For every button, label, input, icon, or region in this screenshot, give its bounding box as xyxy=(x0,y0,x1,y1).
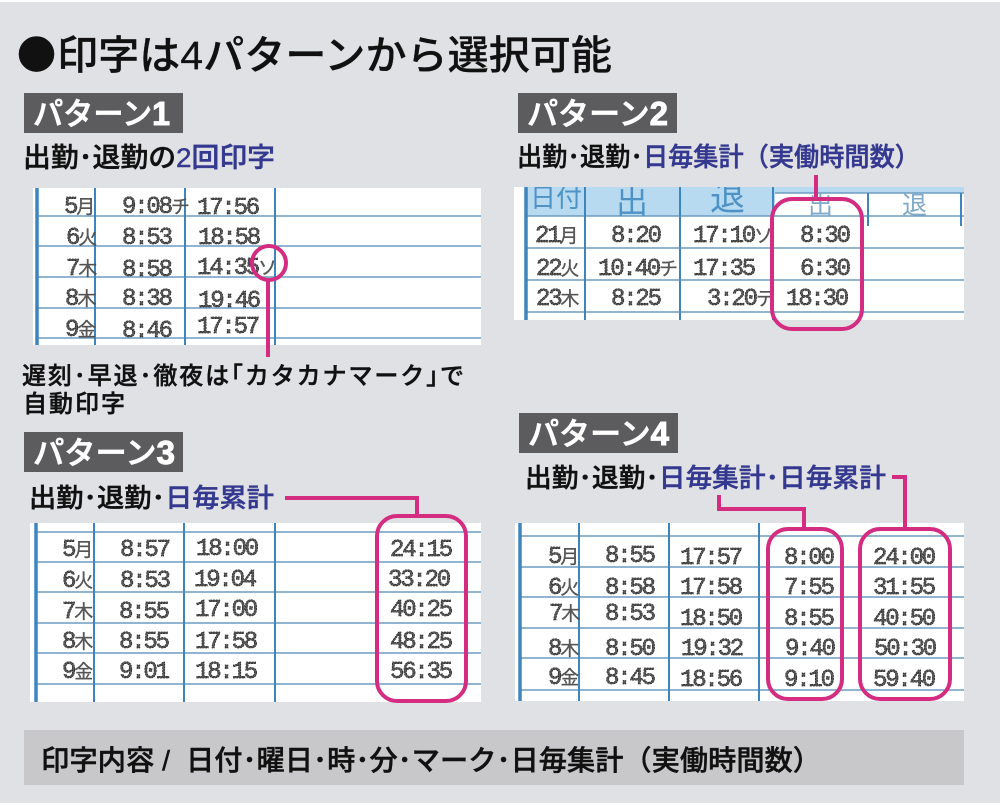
footer bar: print contents: 日付･曜日･時･分･マーク･日毎集計（実働時間数） xyxy=(186,745,821,776)
table: pattern 2 time card xyxy=(514,179,964,320)
table: pattern 1 time card: 18:58 xyxy=(198,225,260,252)
table: pattern 4 time card: 59:40 xyxy=(873,667,935,694)
table: pattern 4 time card: 18:56 xyxy=(680,667,742,694)
table: pattern 4 time card: 31:55 xyxy=(873,575,935,602)
table: pattern 2 time card: 退 xyxy=(902,192,927,220)
table: pattern 2 time card: 出 xyxy=(808,192,833,220)
subheading: pattern 1: 出勤･退勤の2回印字 xyxy=(23,143,275,173)
table: pattern 3 time card: 48:25 xyxy=(390,629,452,656)
table: pattern 4 time card xyxy=(515,523,964,701)
table: pattern 3 time card: 8木 xyxy=(62,629,93,656)
table: pattern 1 time card: 8:53 xyxy=(122,225,172,252)
table: pattern 4 time card: 8:53 xyxy=(605,601,655,628)
table: pattern 2 time card: 22火 xyxy=(536,256,579,283)
table: pattern 4 time card: 9:40 xyxy=(785,636,835,663)
table: pattern 2 time card: 23木 xyxy=(536,286,579,313)
table: pattern 2 time card: 17:35 xyxy=(693,256,755,283)
callout: daily total highlight with leader line xyxy=(719,495,842,699)
table: pattern 2 time card: 8:25 xyxy=(611,286,661,313)
table: pattern 1 time card: 5月 xyxy=(64,194,94,221)
note: katakana mark text: 遅刻･早退･徹夜は｢カタカナマーク｣で xyxy=(22,363,464,390)
title: ● xyxy=(17,25,56,81)
table: pattern 3 time card: 17:00 xyxy=(195,597,257,624)
table: pattern 1 time card: 7木 xyxy=(66,256,97,283)
table: pattern 4 time card: 8:00 xyxy=(784,545,834,572)
panel: pattern 3 xyxy=(24,432,481,702)
note: katakana mark text: 自動印字 xyxy=(23,391,125,418)
table: pattern 1 time card: 8:38 xyxy=(122,286,172,313)
table: pattern 1 time card: 19:46 xyxy=(198,288,260,315)
table: pattern 2 time card: 8:30 xyxy=(800,223,850,250)
footer bar: print contents: 印字内容 / xyxy=(41,745,170,776)
note: katakana mark text xyxy=(22,363,464,418)
heading: pattern 2 label: パターン2 xyxy=(527,95,668,132)
table: pattern 2 time card: 出 xyxy=(616,184,648,220)
panel: pattern 2 xyxy=(514,93,964,329)
table: pattern 4 time card: 17:58 xyxy=(680,575,742,602)
callout: cumulative total highlight with leader line xyxy=(860,477,950,699)
table: pattern 3 time card: 5月 xyxy=(62,537,92,564)
table: pattern 4 time card: 5月 xyxy=(548,544,578,571)
table: pattern 1 time card: 6火 xyxy=(66,225,97,252)
table: pattern 1 time card: 14:35ソ xyxy=(197,255,276,282)
table: pattern 3 time card: 7木 xyxy=(62,599,93,626)
table: pattern 3 time card: 9:01 xyxy=(119,659,170,686)
subheading: pattern 2: 出勤･退勤･日毎集計（実働時間数） xyxy=(517,142,920,172)
table: pattern 3 time card: 6火 xyxy=(62,568,93,595)
callout: daily total highlight with leader line xyxy=(772,175,862,329)
table: pattern 4 time card: 9金 xyxy=(548,665,579,692)
table: pattern 4 time card: 7木 xyxy=(549,601,580,628)
table: pattern 4 time card: 17:57 xyxy=(680,545,742,572)
table: pattern 3 time card: 8:57 xyxy=(120,537,170,564)
table: pattern 3 time card: 33:20 xyxy=(388,567,450,594)
table: pattern 2 time card: 18:30 xyxy=(786,286,848,313)
table: pattern 4 time card: 40:50 xyxy=(873,606,935,633)
heading: pattern 1 label: パターン1 xyxy=(33,95,170,132)
table: pattern 1 time card: 17:57 xyxy=(197,314,259,341)
table: pattern 3 time card: 9金 xyxy=(62,659,93,686)
table: pattern 2 time card: 10:40チ xyxy=(598,256,677,283)
table: pattern 4 time card: 50:30 xyxy=(874,636,936,663)
table: pattern 3 time card: 40:25 xyxy=(390,597,452,624)
table: pattern 3 time card: 8:55 xyxy=(119,599,169,626)
table: pattern 4 time card: 18:50 xyxy=(680,606,742,633)
table: pattern 2 time card: 退 xyxy=(710,179,745,218)
table: pattern 1 time card: 17:56 xyxy=(197,195,259,222)
table: pattern 1 time card: 8:58 xyxy=(122,257,172,284)
callout: circle on katakana mark with leader line xyxy=(252,246,286,357)
heading: pattern 3 label: パターン3 xyxy=(33,434,175,471)
heading: pattern 4 label: パターン4 xyxy=(528,415,670,452)
table: pattern 4 time card: 6火 xyxy=(548,575,579,602)
table: pattern 3 time card: 18:15 xyxy=(195,659,257,686)
table: pattern 4 time card: 8木 xyxy=(548,636,579,663)
panel: pattern 4 xyxy=(515,413,964,701)
table: pattern 2 time card: 日付 xyxy=(530,183,582,213)
table: pattern 4 time card: 8:58 xyxy=(605,575,655,602)
title: 印字は4パターンから選択可能 xyxy=(57,34,612,78)
table: pattern 3 time card: 18:00 xyxy=(196,536,258,563)
table: pattern 4 time card: 8:50 xyxy=(605,636,655,663)
table: pattern 4 time card: 7:55 xyxy=(784,575,834,602)
table: pattern 2 time card: 17:10ソ xyxy=(693,223,772,250)
table: pattern 3 time card: 17:58 xyxy=(195,629,257,656)
table: pattern 1 time card: 9金 xyxy=(65,317,96,344)
table: pattern 3 time card: 8:53 xyxy=(120,568,170,595)
table: pattern 3 time card: 8:55 xyxy=(119,629,169,656)
footer bar: print contents xyxy=(24,730,964,785)
table: pattern 4 time card: 24:00 xyxy=(873,545,935,572)
table: pattern 2 time card: 3:20テ xyxy=(707,286,774,313)
subheading: pattern 3: 出勤･退勤･日毎累計 xyxy=(29,483,274,513)
table: pattern 2 time card: 21月 xyxy=(535,223,577,250)
table: pattern 3 time card xyxy=(30,523,481,702)
table: pattern 3 time card: 56:35 xyxy=(390,659,452,686)
table: pattern 3 time card: 19:04 xyxy=(194,567,257,594)
table: pattern 2 time card: 6:30 xyxy=(800,256,850,283)
subheading: pattern 4: 出勤･退勤･日毎集計･日毎累計 xyxy=(525,463,886,493)
table: pattern 4 time card: 8:55 xyxy=(784,606,834,633)
table: pattern 1 time card: 8:46 xyxy=(122,318,172,345)
table: pattern 1 time card xyxy=(33,188,481,345)
table: pattern 4 time card: 8:55 xyxy=(605,543,655,570)
table: pattern 2 time card: 8:20 xyxy=(611,223,661,250)
table: pattern 1 time card: 9:08チ xyxy=(122,194,189,221)
table: pattern 4 time card: 8:45 xyxy=(605,665,655,692)
table: pattern 4 time card: 9:10 xyxy=(784,667,834,694)
callout: cumulative total highlight with leader line xyxy=(285,498,466,701)
panel: pattern 1 xyxy=(22,93,481,418)
table: pattern 3 time card: 24:15 xyxy=(390,537,452,564)
table: pattern 4 time card: 19:32 xyxy=(681,636,743,663)
table: pattern 1 time card: 8木 xyxy=(65,286,96,313)
